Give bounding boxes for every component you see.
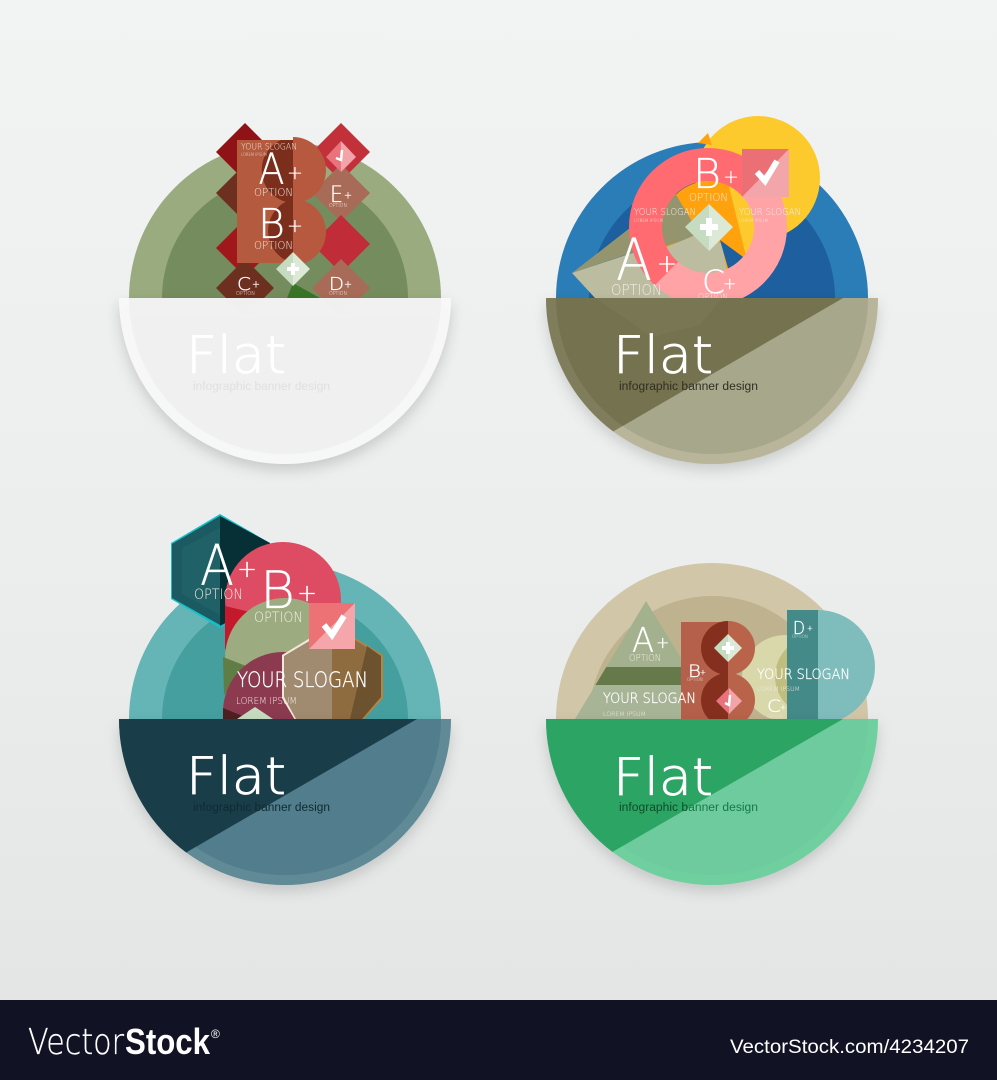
icon: check square <box>742 149 789 197</box>
tile labels: D <box>329 274 344 295</box>
panel: top left olive badge <box>119 123 451 470</box>
panel: bottom left teal badge <box>119 514 451 891</box>
tile labels: LOREM IPSUM <box>757 685 800 693</box>
tile labels: + <box>287 215 303 237</box>
heading: Flat <box>186 747 286 807</box>
tile labels: A <box>632 621 654 661</box>
heading: infographic banner design <box>619 381 758 393</box>
band shadow <box>119 725 451 891</box>
ring labels: C <box>702 263 725 301</box>
footer logo: Vector <box>28 1022 124 1063</box>
heading: Flat <box>186 326 286 386</box>
ring <box>629 148 787 306</box>
footer logo <box>28 1021 220 1063</box>
glass half-circle band <box>119 298 451 464</box>
tile labels: LOREM IPSUM <box>603 710 646 718</box>
tile labels: OPTION <box>629 653 661 664</box>
inner disc <box>662 181 752 270</box>
tile labels: YOUR SLOGAN <box>757 667 850 683</box>
heading: infographic banner design <box>193 802 330 814</box>
ring labels: A <box>616 226 652 294</box>
tile labels: YOUR SLOGAN <box>603 691 696 707</box>
tile labels: LOREM IPSUM <box>236 696 297 707</box>
ring labels: OPTION <box>698 292 728 303</box>
slogan panel with rounded tabs <box>237 137 326 265</box>
tile labels: B <box>260 561 295 621</box>
ring labels: OPTION <box>611 281 662 299</box>
backdrop circles <box>556 142 868 298</box>
ring labels: B <box>693 150 721 198</box>
icon: plus diamond <box>714 634 742 662</box>
footer bar <box>0 1000 997 1080</box>
ring labels: YOUR SLOGAN <box>634 207 696 218</box>
band shadow <box>119 304 451 470</box>
tile labels: OPTION <box>687 677 703 683</box>
two-tone half-circle band <box>546 719 878 885</box>
diamond tiles <box>216 123 370 317</box>
tile labels: OPTION <box>236 291 255 297</box>
ring labels: + <box>656 249 677 278</box>
tile labels: B <box>688 662 701 682</box>
tile labels: YOUR SLOGAN <box>237 668 368 692</box>
tile labels: + <box>237 555 257 583</box>
heading <box>186 326 330 393</box>
tile labels: C <box>237 274 251 295</box>
tile labels: + <box>252 280 260 290</box>
tile labels <box>236 142 352 297</box>
yellow circle <box>696 116 820 240</box>
heading: infographic banner design <box>193 381 330 393</box>
icon: check diamond <box>326 141 356 172</box>
tile labels: D <box>793 618 805 639</box>
tile labels: + <box>297 579 317 607</box>
tile labels: OPTION <box>792 634 808 640</box>
pale circle tile <box>742 635 787 719</box>
tile labels <box>603 618 850 720</box>
icon: plus diamond <box>276 252 310 286</box>
ring labels <box>611 150 801 303</box>
ring labels: OPTION <box>689 191 728 204</box>
tile labels: OPTION <box>254 239 293 252</box>
triangle tile <box>570 600 685 719</box>
tile labels: + <box>656 633 669 652</box>
tile labels: B <box>258 200 285 248</box>
tile labels: + <box>780 704 786 712</box>
tile labels: E <box>330 183 343 208</box>
heading: infographic b anner design <box>619 802 758 814</box>
tile labels: OPTION <box>329 291 347 297</box>
brown octagon tile <box>282 638 383 720</box>
tile labels: + <box>344 280 352 290</box>
olive arrow shape <box>572 194 678 298</box>
ring labels: YOUR SLOGAN <box>739 207 801 218</box>
ring labels: + <box>723 274 736 293</box>
tile labels: OPTION <box>254 186 293 199</box>
tile labels: A <box>258 146 284 195</box>
ring labels: LOREM IPSUM <box>739 218 768 224</box>
tile labels: C <box>767 697 781 717</box>
backdrop circles <box>129 570 441 719</box>
tile labels: LOREM IPSUM <box>241 152 267 157</box>
tile labels: OPTION <box>767 714 783 720</box>
footer logo: ® <box>211 1027 220 1041</box>
icon: check diamond <box>716 688 742 714</box>
rust tile with rounded tabs <box>681 621 755 727</box>
tile labels: OPTION <box>254 610 303 626</box>
band shadow <box>546 304 878 470</box>
tile labels: OPTION <box>329 203 347 209</box>
heading <box>186 747 330 814</box>
ring labels: LOREM IPSUM <box>634 218 663 224</box>
panel: bottom right green badge <box>546 563 878 891</box>
tile labels: YOUR SLOGAN <box>241 142 297 152</box>
heading <box>613 326 758 393</box>
ring labels: + <box>723 166 739 188</box>
tile labels <box>194 534 368 707</box>
tile labels: A <box>200 534 234 599</box>
icon: plus diamond <box>685 204 733 251</box>
heading: Flat <box>613 326 713 386</box>
teal tab <box>787 610 875 724</box>
heading <box>613 748 758 814</box>
tile labels: + <box>700 668 706 676</box>
backdrop circles <box>129 144 441 298</box>
hexagon tile <box>171 514 270 628</box>
two-tone half-circle band <box>119 719 451 885</box>
panel: top right blue badge <box>546 116 878 470</box>
band shadow <box>546 725 878 891</box>
two-tone half-circle band <box>546 298 878 464</box>
heading: Flat <box>613 748 713 808</box>
footer url: VectorStock.com/4234207 <box>730 1036 969 1058</box>
stacked semicircle tiles <box>223 542 341 719</box>
tile labels: + <box>344 190 352 202</box>
backdrop circles <box>556 563 868 719</box>
tile labels: + <box>807 624 813 632</box>
tile labels: + <box>287 162 303 184</box>
icon: check square <box>309 603 355 649</box>
tile labels: OPTION <box>194 587 243 603</box>
footer logo: Stock <box>125 1021 211 1062</box>
small diamond <box>237 707 273 719</box>
